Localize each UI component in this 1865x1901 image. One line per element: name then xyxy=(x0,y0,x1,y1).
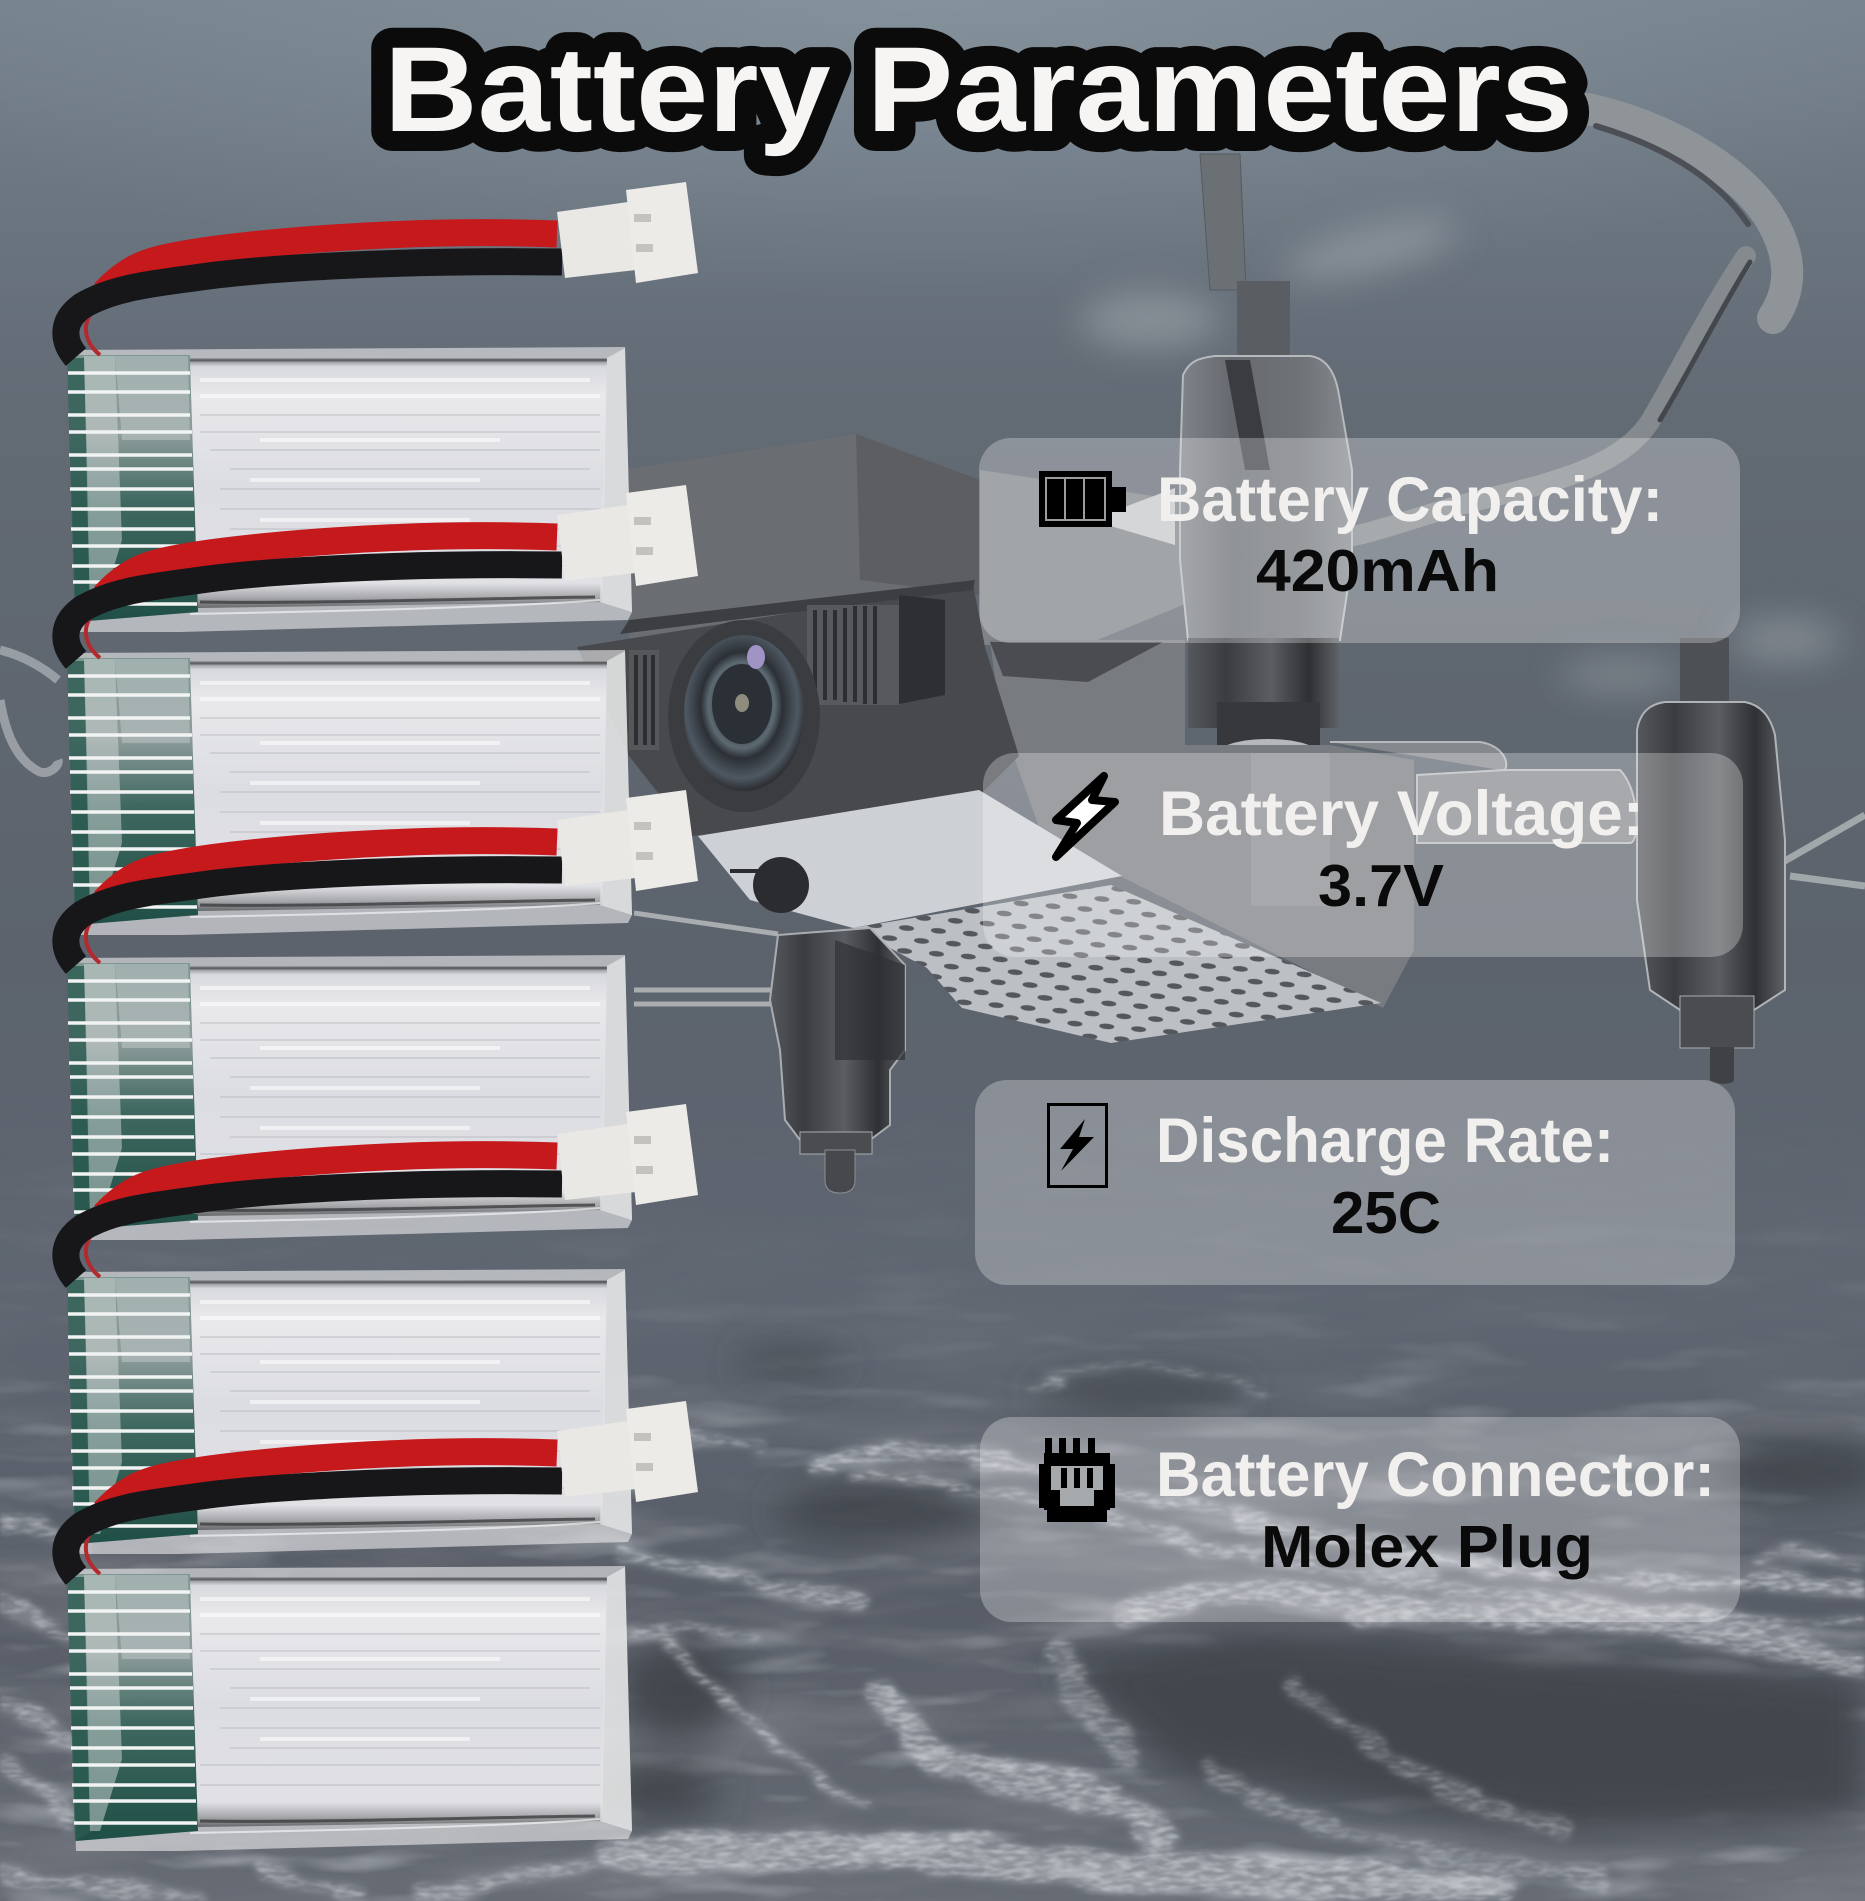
drone xyxy=(0,109,1865,1193)
right motor xyxy=(1637,638,1785,1084)
motor stem xyxy=(1251,753,1330,906)
panel: battery connector xyxy=(980,1417,1740,1622)
top shaft xyxy=(1200,154,1246,290)
motor arm xyxy=(1330,742,1637,843)
heading: battery capacity: Battery Capacity: xyxy=(1157,465,1663,535)
heading: discharge rate: Discharge Rate: xyxy=(1156,1106,1614,1176)
icon: connector xyxy=(1039,1438,1115,1522)
propeller blur streaks xyxy=(1080,207,1840,689)
panel: battery voltage xyxy=(983,753,1743,957)
drone guard arm xyxy=(1354,109,1787,536)
top motor xyxy=(1180,281,1352,765)
dark shoulder chevron xyxy=(990,642,1163,682)
camera lens xyxy=(668,620,820,812)
battery 3 xyxy=(66,790,698,1240)
battery 4 xyxy=(66,1104,698,1554)
value: 3.7V: 3.7V xyxy=(1318,853,1444,919)
battery packs stack xyxy=(66,182,698,1851)
value: 25C: 25C xyxy=(1331,1180,1441,1246)
icon: battery xyxy=(1039,471,1126,527)
light wedge on inner arm xyxy=(1090,488,1175,545)
right arm struts xyxy=(1783,815,1865,886)
lower left motor xyxy=(770,928,905,1193)
icon: discharge xyxy=(1048,1104,1106,1186)
left arms xyxy=(634,913,778,1004)
gray shoulder and lip xyxy=(990,640,1414,1008)
heading: battery connector: Battery Connector: xyxy=(1156,1440,1715,1510)
drone top shell xyxy=(629,434,980,640)
value: Molex Plug: Molex Plug xyxy=(1261,1514,1593,1580)
panel: battery capacity xyxy=(979,438,1740,643)
sensor xyxy=(730,857,809,913)
drone belly light panel xyxy=(698,790,1122,928)
left guard fragment xyxy=(0,650,58,773)
panel: discharge rate xyxy=(975,1080,1735,1285)
speaker grille xyxy=(853,885,1381,1043)
battery 2 xyxy=(66,485,698,935)
battery 5 xyxy=(66,1401,698,1851)
drone inner arm under panel one xyxy=(980,470,1195,645)
dark front body xyxy=(577,584,1019,836)
heading: battery voltage: Battery Voltage: xyxy=(1159,779,1644,849)
title: Battery Parameters xyxy=(384,21,1573,157)
gimbal fins xyxy=(629,595,945,750)
battery 1 xyxy=(66,182,698,632)
value: 420mAh: 420mAh xyxy=(1256,538,1499,604)
icon: lightning bolt xyxy=(1056,776,1115,857)
